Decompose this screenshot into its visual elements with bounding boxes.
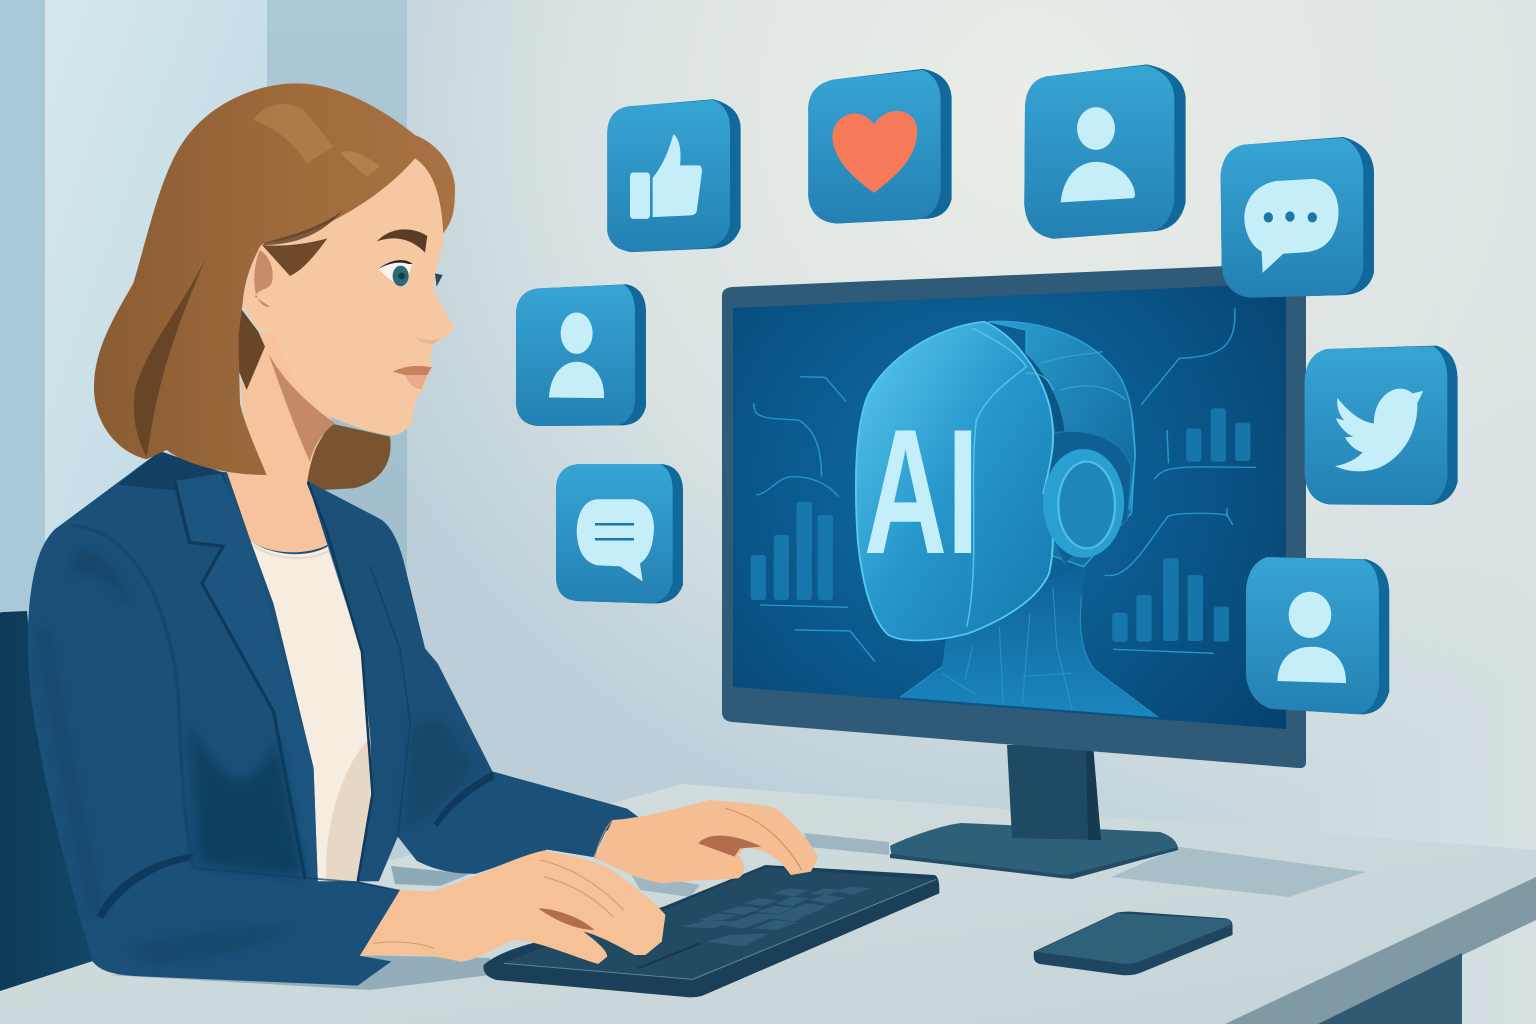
icon: speech bubble with lines	[556, 464, 683, 604]
jacket	[28, 451, 640, 986]
face	[242, 150, 453, 435]
robot face mask	[856, 322, 1053, 640]
eye	[378, 261, 412, 286]
shirt	[250, 541, 372, 881]
icon: speech bubble with dots	[1221, 137, 1374, 298]
hair	[94, 83, 455, 475]
jacket shoulder shadow	[118, 451, 227, 490]
AI label: AI	[864, 391, 979, 591]
robot neck and shoulders	[900, 560, 1158, 717]
icon: person left	[516, 284, 646, 426]
brow	[377, 229, 427, 253]
key grid	[682, 887, 871, 947]
circuit lines	[754, 308, 1256, 662]
icon: person lower right	[1246, 557, 1389, 714]
AI head on screen	[751, 308, 1256, 717]
desk	[0, 784, 1536, 1024]
left lapel	[175, 474, 318, 881]
neck	[240, 330, 333, 483]
lips	[393, 366, 432, 375]
phone	[1034, 912, 1233, 975]
sleeve and arm folds	[72, 526, 194, 868]
chair back	[0, 611, 93, 991]
head	[94, 83, 455, 483]
icon: thumbs up	[607, 99, 741, 252]
nose shading	[415, 337, 444, 345]
sideburn shadow	[262, 238, 327, 276]
icon: bird	[1305, 346, 1458, 505]
headphone cup	[1043, 449, 1124, 558]
chart bars	[751, 408, 1250, 642]
hair shadow locks	[134, 257, 207, 457]
chest shadow	[189, 723, 303, 878]
monitor	[722, 263, 1306, 768]
near hand	[360, 851, 665, 964]
ear	[254, 250, 273, 307]
keyboard body	[484, 865, 939, 997]
hair behind neck	[303, 423, 391, 491]
monitor stand	[890, 745, 1178, 879]
right lapel	[307, 481, 410, 881]
monitor bezel	[722, 263, 1306, 768]
monitor screen	[733, 283, 1286, 729]
neck base	[221, 455, 327, 552]
far hand	[595, 800, 818, 883]
keyboard	[484, 865, 939, 997]
hair shadow behind ear	[238, 305, 265, 390]
icon: person top	[1024, 64, 1186, 239]
icon: heart	[808, 69, 952, 224]
robot skull	[988, 321, 1135, 567]
headphone band	[1029, 431, 1131, 563]
hands	[360, 800, 818, 964]
